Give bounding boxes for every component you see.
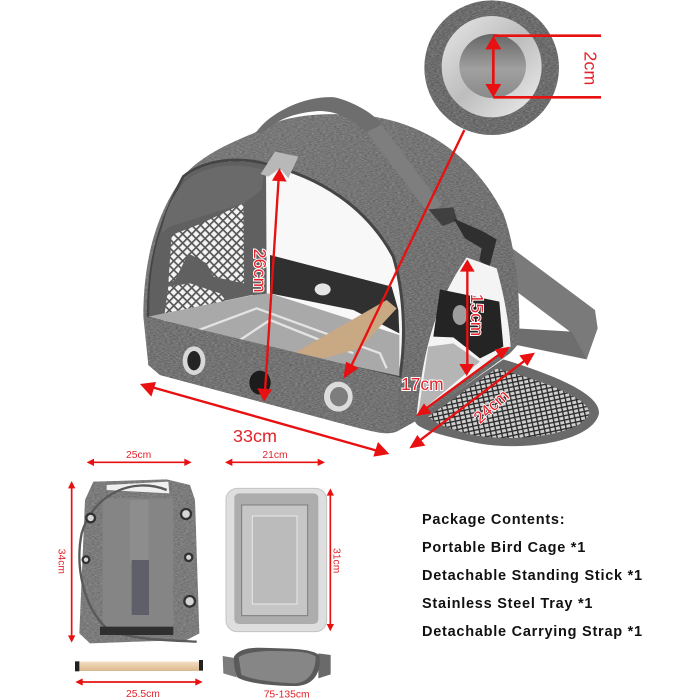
carrying strap lower band <box>517 328 587 359</box>
inner panel <box>103 498 173 630</box>
carrying strap upper band <box>497 237 598 359</box>
metal ring <box>442 16 542 117</box>
item: steel tray: Stainless Steel Tray *1 <box>422 596 593 612</box>
wooden perch <box>295 300 397 358</box>
21cm width arrow <box>225 450 325 466</box>
15cm dimension: 15cm <box>467 294 487 336</box>
grommet right <box>324 382 353 412</box>
grommets <box>83 509 195 607</box>
zipper pull <box>261 152 298 178</box>
2cm dimension: 2cm <box>580 51 600 85</box>
standing stick <box>75 660 203 671</box>
26cm dimension <box>250 168 287 402</box>
lower parts section <box>55 450 342 700</box>
package contents list <box>422 512 643 640</box>
ring opening <box>459 34 526 98</box>
34cm height arrow <box>55 481 75 643</box>
strap over top <box>367 125 442 213</box>
window mesh lower <box>163 283 227 323</box>
26cm dimension: 26cm <box>250 249 270 293</box>
34cm height arrow: 34cm <box>55 549 66 574</box>
tray inside door <box>418 343 480 413</box>
list heading: Package Contents: <box>422 512 565 528</box>
main product: bird carrier with dimensions <box>140 0 601 457</box>
window mesh upper <box>168 203 244 283</box>
velcro strip lower <box>132 560 149 615</box>
17cm dimension: 17cm <box>401 374 444 394</box>
stainless tray <box>148 293 399 376</box>
25cm width arrow: 25cm <box>126 450 151 461</box>
folded cage <box>79 479 199 643</box>
25.5cm stick arrow <box>75 678 203 700</box>
item: bird cage: Portable Bird Cage *1 <box>422 540 586 556</box>
31cm height arrow <box>327 488 342 631</box>
buckle <box>453 218 497 267</box>
item: standing stick: Detachable Standing Stick *1 <box>422 568 643 584</box>
grommet left <box>183 346 205 375</box>
inset: stainless vent close-up <box>424 0 559 135</box>
side door opening <box>417 257 511 415</box>
front window <box>148 160 403 376</box>
folded bottom <box>100 627 173 635</box>
25cm width arrow <box>87 450 192 466</box>
inner hole <box>453 305 467 325</box>
tray rim detail <box>190 308 387 368</box>
24cm dimension: 24cm <box>470 386 513 427</box>
velcro strip <box>130 500 148 563</box>
bag body <box>143 114 519 433</box>
17cm dimension <box>401 347 510 416</box>
25.5cm stick arrow: 25.5cm <box>126 689 160 700</box>
strap keeper <box>428 207 457 226</box>
top handle <box>256 97 382 134</box>
carrying strap pad <box>223 648 331 686</box>
back wall hole <box>315 283 331 295</box>
white paper <box>107 482 169 493</box>
24cm dimension <box>409 353 535 448</box>
stainless tray <box>226 488 327 632</box>
33cm dimension: 33cm <box>233 426 277 446</box>
item: carrying strap: Detachable Carrying Strap *1 <box>422 624 643 640</box>
dark upper flap <box>162 166 264 233</box>
leader from inset to vent <box>343 130 464 379</box>
21cm width arrow: 21cm <box>262 450 288 461</box>
left pane backing <box>149 162 267 317</box>
31cm height arrow: 31cm <box>331 548 342 573</box>
2cm dimension <box>485 36 601 97</box>
33cm dimension <box>140 382 389 457</box>
front fabric band <box>147 317 399 433</box>
15cm dimension <box>459 259 487 376</box>
inner dark panel <box>433 289 503 358</box>
door flap with mesh <box>415 359 599 446</box>
clasp <box>249 371 271 395</box>
dark back wall <box>270 255 399 333</box>
arch of window <box>79 485 197 642</box>
